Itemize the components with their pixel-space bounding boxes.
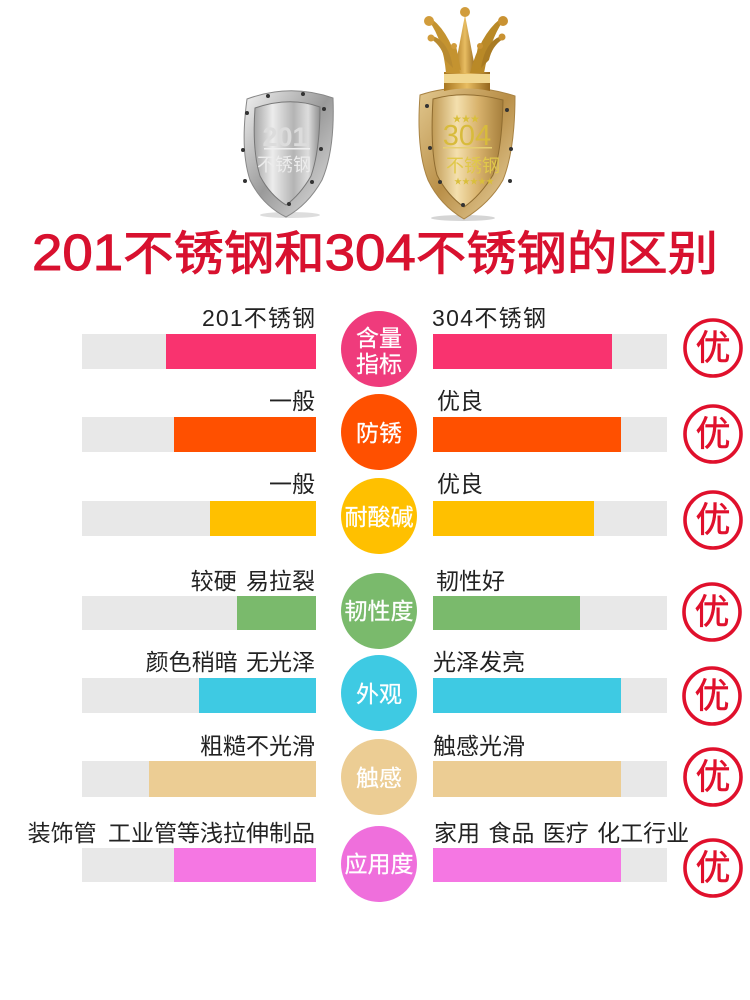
badge: 触感 — [341, 739, 417, 815]
bar: 304 触感 — [433, 761, 667, 797]
label: 304不锈钢: 304不锈钢 — [432, 305, 546, 331]
label: 家用 食品 医疗 化工行业: 家用 食品 医疗 化工行业 — [434, 820, 689, 846]
badge: 外观: 外观 — [356, 681, 402, 707]
badge: 含量指标 — [341, 311, 417, 387]
icon: crown — [424, 7, 508, 91]
icon: golden 304 shield with crown: ★★★★★ — [454, 177, 494, 186]
badge: 耐酸碱: 耐酸碱 — [344, 504, 414, 530]
panel: row 防锈 — [82, 388, 741, 470]
bar: 304 防锈 — [433, 417, 667, 452]
panel: row 耐酸碱 — [82, 471, 741, 554]
label: 较硬 易拉裂: 较硬 易拉裂 — [191, 568, 315, 594]
stamp: 优 — [685, 840, 741, 896]
stamp: 优 — [684, 584, 740, 640]
bar: 201 耐酸碱 — [82, 501, 316, 536]
icon: silver 201 shield: 不锈钢 — [257, 155, 311, 175]
badge: 应用度 — [341, 826, 417, 902]
bar: 304 韧性度 — [433, 596, 667, 630]
bar: 304 耐酸碱 — [433, 501, 667, 536]
stamp: 优: 优 — [695, 758, 731, 797]
badge: 防锈: 防锈 — [356, 420, 402, 446]
label: 颜色稍暗 无光泽: 颜色稍暗 无光泽 — [146, 649, 315, 675]
label: 一般: 一般 — [269, 388, 315, 414]
bar: 304 含量指标 — [433, 334, 667, 369]
badge: 韧性度: 韧性度 — [344, 598, 414, 624]
panel: row 触感 — [82, 733, 741, 815]
icon: golden 304 shield with crown: 不锈钢 — [446, 156, 500, 176]
badge: 外观 — [341, 655, 417, 731]
label: 装饰管 工业管等浅拉伸制品: 装饰管 工业管等浅拉伸制品 — [28, 820, 315, 846]
label: 优良: 优良 — [437, 388, 483, 414]
stamp: 优: 优 — [695, 415, 731, 454]
stamp: 优: 优 — [695, 501, 731, 540]
stamp: 优: 优 — [694, 677, 730, 716]
stamp: 优 — [685, 406, 741, 462]
bar: 304 应用度 — [433, 848, 667, 882]
icon: silver 201 shield: 201 — [262, 122, 308, 152]
label: 优良: 优良 — [437, 471, 483, 497]
bar: 201 触感 — [82, 761, 316, 797]
label: 韧性好: 韧性好 — [436, 568, 505, 594]
stamp: 优 — [685, 320, 741, 376]
icon: golden 304 shield with crown: 304 — [443, 120, 491, 152]
panel: row 含量指标 — [82, 305, 741, 387]
stamp: 优 — [684, 668, 740, 724]
bar: 201 防锈 — [82, 417, 316, 452]
title: 201不锈钢和 304不锈钢的区别 — [32, 224, 718, 281]
badge: 韧性度 — [341, 573, 417, 649]
label: 触感光滑: 触感光滑 — [433, 733, 525, 759]
stamp: 优: 优 — [695, 849, 731, 888]
bar: 201 含量指标 — [82, 334, 316, 369]
badge: 含量指标: 含量 — [356, 325, 402, 351]
badge: 应用度: 应用度 — [344, 851, 414, 877]
badge: 触感: 触感 — [356, 765, 402, 791]
badge: 含量指标: 指标 — [356, 351, 402, 377]
badge: 防锈 — [341, 394, 417, 470]
stamp: 优 — [685, 492, 741, 548]
label: 一般: 一般 — [269, 471, 315, 497]
panel: row 外观 — [82, 649, 740, 731]
icon: silver 201 shield — [241, 91, 333, 218]
panel: row 韧性度 — [82, 568, 740, 649]
bar: 304 外观 — [433, 678, 667, 713]
stamp: 优 — [685, 749, 741, 805]
label: 201不锈钢: 201不锈钢 — [202, 305, 315, 331]
panel: row 应用度 — [28, 820, 741, 902]
icon: golden 304 shield with crown — [419, 7, 515, 221]
bar: 201 韧性度 — [82, 596, 316, 630]
badge: 耐酸碱 — [341, 478, 417, 554]
icon: golden 304 shield with crown: ★★★ — [452, 114, 480, 124]
label: 粗糙不光滑: 粗糙不光滑 — [200, 733, 315, 759]
bar: 201 应用度 — [82, 848, 316, 882]
label: 光泽发亮: 光泽发亮 — [433, 649, 525, 675]
stamp: 优: 优 — [694, 593, 730, 632]
stamp: 优: 优 — [695, 329, 731, 368]
bar: 201 外观 — [82, 678, 316, 713]
